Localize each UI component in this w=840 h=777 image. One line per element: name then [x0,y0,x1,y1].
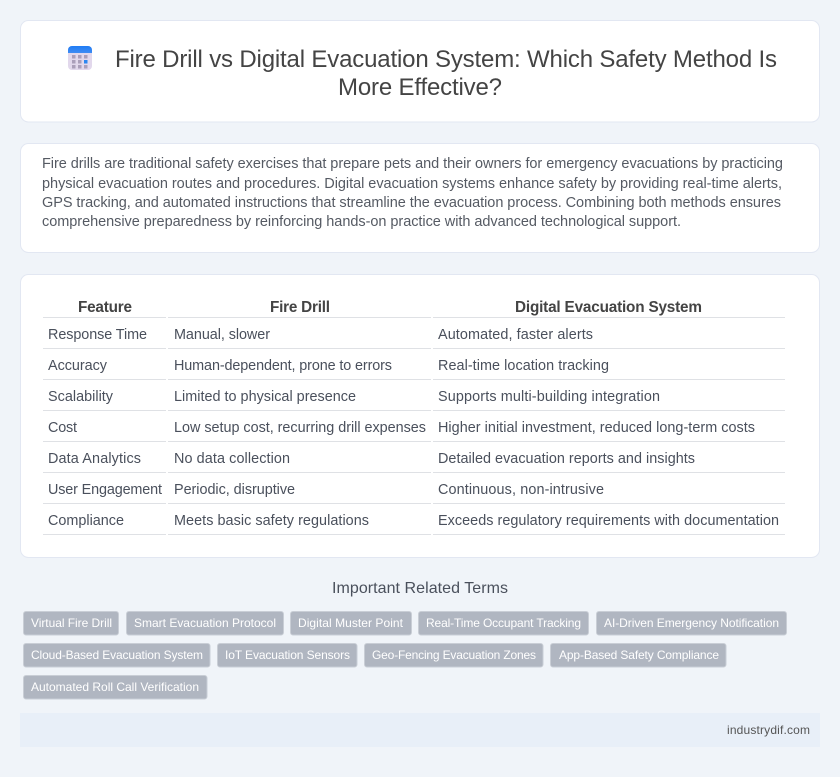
tag [24,644,210,667]
footer [20,713,820,747]
tag [218,644,357,667]
panel: description: comprehensive preparedness by reinforcing hands-on practice with advanced technological support. [42,214,681,230]
row: response time [48,327,593,343]
row: user engagement: Continuous, non-intrusive [438,482,604,498]
table header [78,299,702,316]
row: scalability: Scalability [48,389,114,405]
row: user engagement: Periodic, disruptive [174,482,295,498]
tag: Geo-Fencing Evacuation Zones [372,648,536,662]
tag [24,612,118,635]
table header: Fire Drill [270,299,330,316]
title: More Effective? [338,74,502,101]
tag [550,644,726,667]
tag: AI-Driven Emergency Notification [604,616,779,630]
panel: title header [20,20,820,122]
table header: Digital Evacuation System [515,299,702,316]
row: response time: Response Time [48,327,147,343]
title: Fire Drill vs Digital Evacuation System: Which Safety Method Is [115,46,777,73]
panel: description: GPS tracking, and automated instructions that streamline the evacuation process. Combining both methods ensures [42,195,781,211]
tag [126,612,284,635]
row: data analytics [48,451,695,467]
row: compliance: Exceeds regulatory requirements with documentation [438,513,779,529]
table header: Feature [78,299,132,316]
tag: Automated Roll Call Verification [31,680,199,694]
footer: industrydif.com [727,723,810,737]
tag: Real-Time Occupant Tracking [426,616,581,630]
row: cost [48,420,755,436]
tag: Cloud-Based Evacuation System [31,648,203,662]
tag [596,612,786,635]
row: user engagement: User Engagement [48,482,162,498]
tag [290,612,412,635]
row: compliance: Meets basic safety regulations [174,513,369,529]
row: user engagement [48,482,604,498]
row: data analytics: Detailed evacuation reports and insights [438,451,695,467]
row: data analytics: Data Analytics [48,451,141,467]
title [115,46,777,101]
tag [418,612,588,635]
row: scalability: Supports multi-building integration [438,389,660,405]
icon: calendar [68,46,92,70]
tag: Virtual Fire Drill [31,616,112,630]
tag: App-Based Safety Compliance [559,648,719,662]
row: data analytics: No data collection [174,451,290,467]
panel: description [20,144,820,252]
row: cost: Cost [48,420,77,436]
row: compliance [48,513,779,529]
row: scalability: Limited to physical presence [174,389,356,405]
row: cost: Low setup cost, recurring drill expenses [174,420,426,436]
panel: description: physical evacuation routes and procedures. Digital evacuation systems enhance safety by providing real-time alerts, [42,176,782,192]
row: response time: Automated, faster alerts [438,327,593,343]
row: scalability [48,389,660,405]
row: accuracy: Human-dependent, prone to errors [174,358,392,374]
tag: Smart Evacuation Protocol [134,616,276,630]
row: compliance: Compliance [48,513,124,529]
row: cost: Higher initial investment, reduced long-term costs [438,420,755,436]
tag: IoT Evacuation Sensors [225,648,350,662]
panel: description: Fire drills are traditional safety exercises that prepare pets and their owners for emergency evacuations by practicing [42,156,783,172]
tag [364,644,543,667]
row: accuracy: Real-time location tracking [438,358,609,374]
row: accuracy [48,358,609,374]
tag [24,676,207,699]
panel: comparison table [20,274,820,558]
row: response time: Manual, slower [174,327,270,343]
heading: important related terms: Important Related Terms [332,580,508,597]
tag: Digital Muster Point [298,616,404,630]
panel: related term tags [24,612,786,699]
row: accuracy: Accuracy [48,358,108,374]
